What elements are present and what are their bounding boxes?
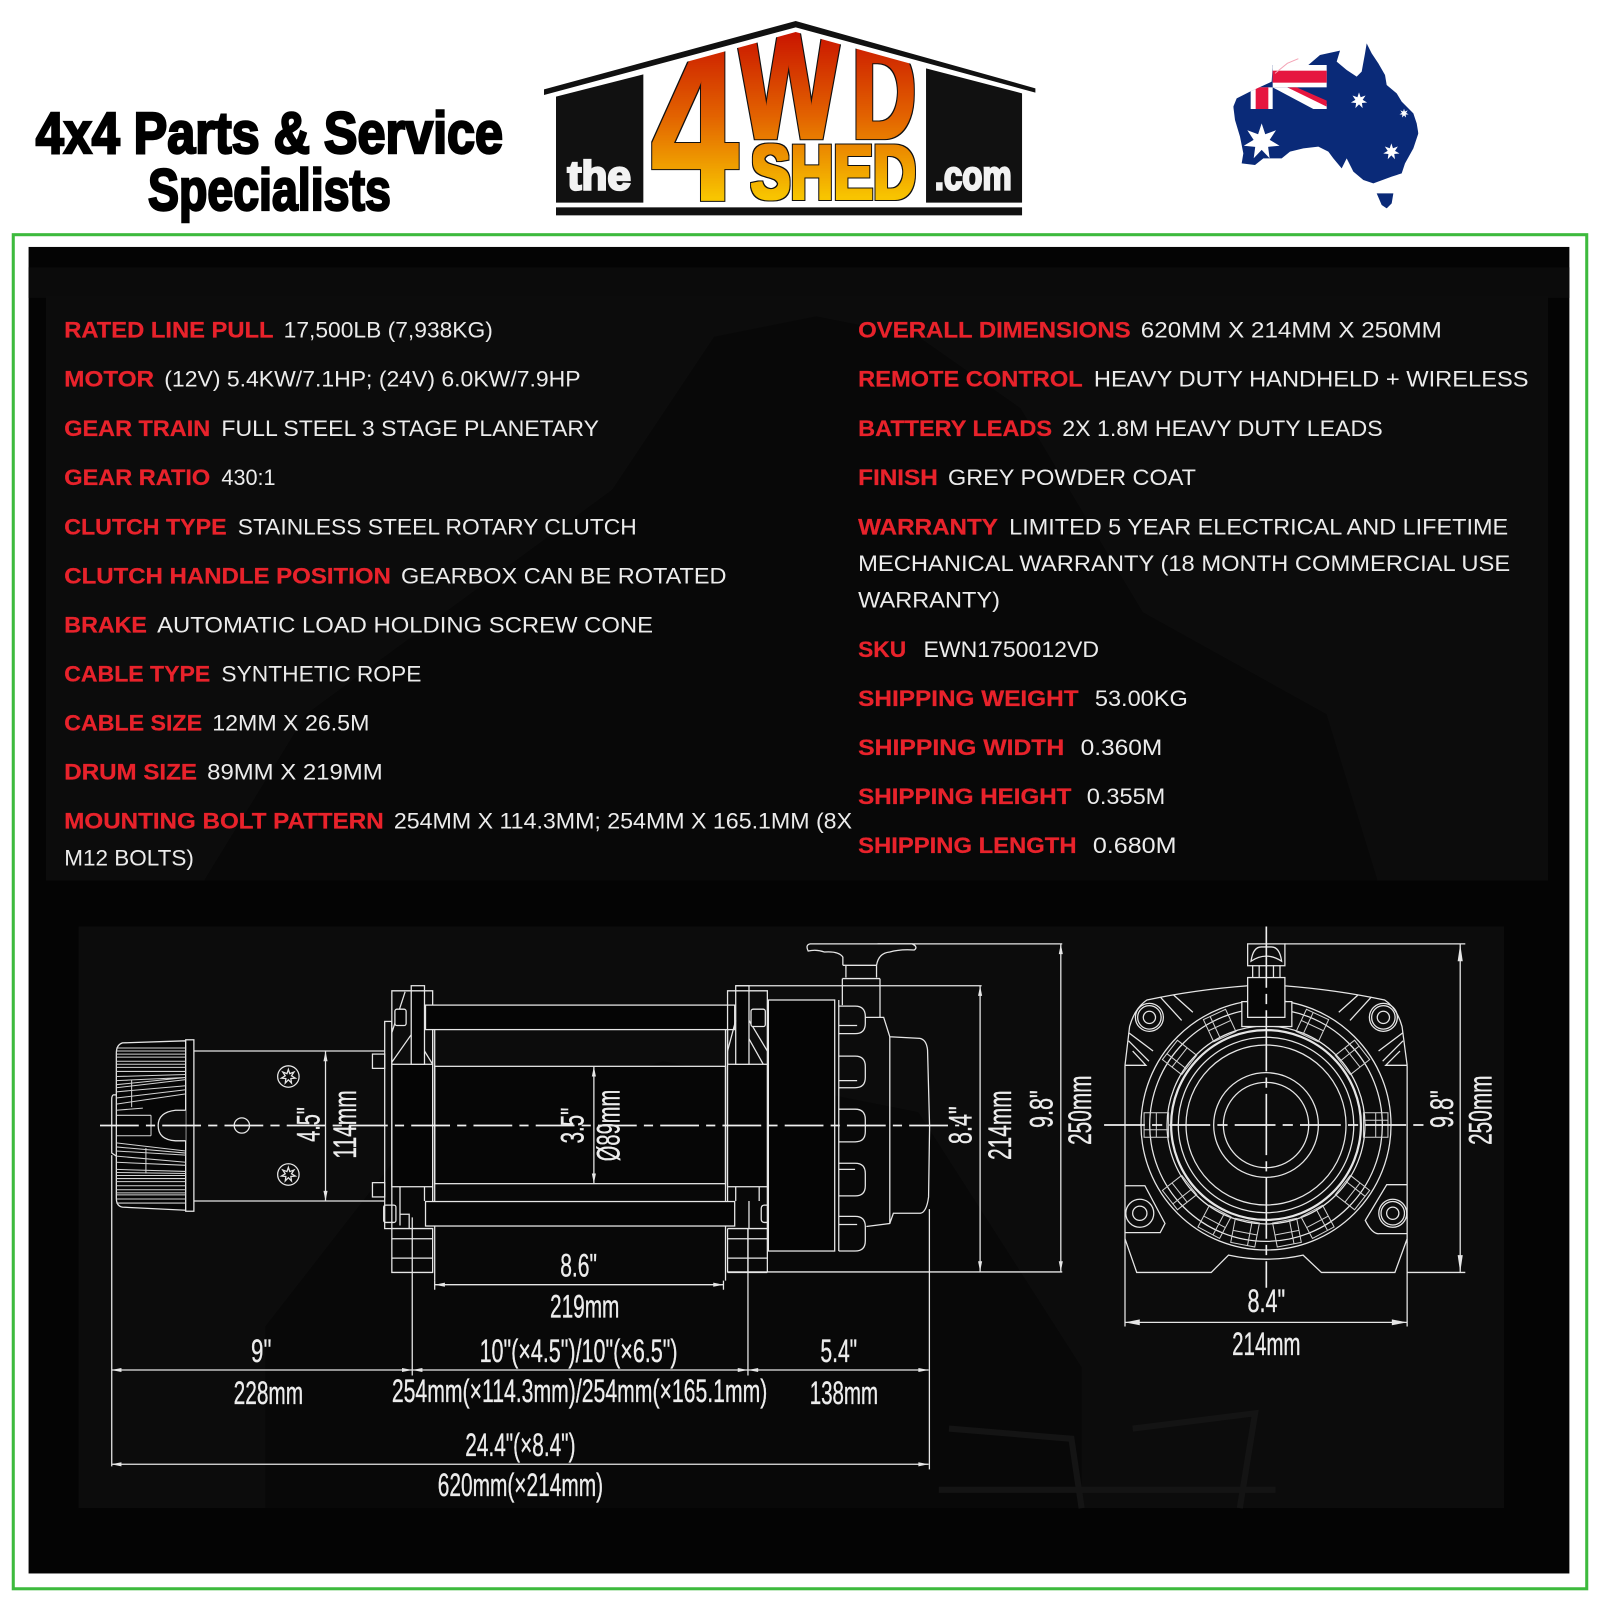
spec: clutch type: CLUTCH TYPE <box>64 515 227 540</box>
spec: shipping height: 0.355M <box>1087 784 1165 809</box>
spec: shipping length <box>858 833 1177 858</box>
spec: gear train <box>64 416 599 441</box>
dimension labels: 8.4" <box>1247 1282 1285 1319</box>
spec: mounting bolt pattern <box>64 809 852 870</box>
spec: shipping length: SHIPPING LENGTH <box>858 833 1077 858</box>
logo: the 4WD Shed .com <box>544 21 1036 216</box>
spec: overall dimensions: OVERALL DIMENSIONS <box>858 318 1131 343</box>
dimension labels: Ø89mm <box>589 1090 626 1161</box>
spec: finish: GREY POWDER COAT <box>948 465 1196 490</box>
dimension labels: 214mm <box>1232 1325 1301 1362</box>
spec: shipping weight: SHIPPING WEIGHT <box>858 686 1079 711</box>
spec: drum size: 89MM X 219MM <box>207 760 383 785</box>
dimension labels: 8.6" <box>560 1247 597 1284</box>
spec: shipping width: 0.360M <box>1081 735 1162 760</box>
dimension arrows <box>111 944 1063 1466</box>
spec: gear ratio: 430:1 <box>221 465 276 490</box>
drum and tie rods <box>426 1005 735 1281</box>
spec: warranty <box>858 515 1510 613</box>
spec: shipping weight <box>858 686 1188 711</box>
spec: mounting bolt pattern: M12 BOLTS) <box>64 845 194 870</box>
spec: sku: EWN1750012VD <box>923 637 1099 662</box>
spec: sku: SKU <box>858 637 906 662</box>
dimension labels: 138mm <box>810 1374 878 1411</box>
centre line <box>100 1125 959 1127</box>
logo: the 4WD Shed .com: W <box>737 0 841 171</box>
spec: shipping height <box>858 784 1165 809</box>
dimension lines <box>111 944 1062 1469</box>
spec: brake: BRAKE <box>64 613 147 638</box>
dimension labels: 228mm <box>234 1374 303 1411</box>
tagline: 4x4 Parts & Service Specialists: Specialists <box>148 158 391 223</box>
logo: the 4WD Shed .com: the <box>567 152 631 198</box>
spec: clutch handle position <box>64 564 727 589</box>
spec: warranty: WARRANTY) <box>858 588 1000 613</box>
dimension labels: 9.8" <box>1022 1090 1059 1128</box>
spec: shipping length: 0.680M <box>1093 833 1177 858</box>
dimension labels: 3.5" <box>554 1108 591 1143</box>
left mounting bracket <box>384 986 433 1272</box>
spec: battery leads: 2X 1.8M HEAVY DUTY LEADS <box>1062 416 1383 441</box>
spec: overall dimensions <box>858 318 1442 343</box>
spec: cable size <box>64 711 369 736</box>
dimension labels: 254mm(×114.3mm)/254mm(×165.1mm) <box>392 1372 767 1409</box>
spec: cable size: CABLE SIZE <box>64 711 202 736</box>
concentric rings <box>1141 1000 1391 1250</box>
spec: gear ratio: GEAR RATIO <box>64 465 210 490</box>
gearbox housing and clutch handle <box>768 944 930 1251</box>
dimension labels <box>1232 1076 1498 1362</box>
spec: remote control: HEAVY DUTY HANDHELD + WIRELESS <box>1094 367 1529 392</box>
spec: clutch type: STAINLESS STEEL ROTARY CLUTCH <box>238 515 637 540</box>
dimension arrows <box>1125 944 1463 1325</box>
motor knob with ribs <box>112 1040 194 1211</box>
dimension lines <box>1125 944 1465 1322</box>
logo: the 4WD Shed .com: SHED <box>751 131 916 216</box>
spec: drum size <box>64 760 383 785</box>
centre lines <box>1104 927 1430 1288</box>
spec: clutch type <box>64 515 637 540</box>
dimension labels: 24.4"(×8.4") <box>465 1426 576 1463</box>
spec: clutch handle position: CLUTCH HANDLE POSITION <box>64 564 391 589</box>
spec: drum size: DRUM SIZE <box>64 760 197 785</box>
spec: shipping width: SHIPPING WIDTH <box>858 735 1064 760</box>
tagline: 4x4 Parts & Service Specialists <box>36 101 503 223</box>
dimension labels: 114mm <box>326 1090 363 1159</box>
spec: battery leads <box>858 416 1383 441</box>
spec: rated line pull: RATED LINE PULL <box>64 318 274 343</box>
housing outline <box>1125 986 1407 1327</box>
ring lugs <box>1144 1009 1388 1247</box>
corner bolts <box>1126 1003 1407 1227</box>
dimension labels: 8.4" <box>941 1106 978 1144</box>
spec: rated line pull <box>64 318 493 343</box>
spec: remote control <box>858 367 1529 392</box>
spec: gear ratio <box>64 465 276 490</box>
spec: cable type: CABLE TYPE <box>64 662 210 687</box>
dimension labels: 250mm <box>1461 1076 1498 1145</box>
panel: specifications right column <box>858 318 1529 858</box>
logo: the 4WD Shed .com: .com <box>935 152 1012 198</box>
dimension labels: 250mm <box>1061 1076 1098 1145</box>
spec: warranty: MECHANICAL WARRANTY (18 MONTH COMMERCIAL USE <box>858 551 1510 576</box>
spec: motor: MOTOR <box>64 367 154 392</box>
dimension labels: 5.4" <box>820 1332 857 1369</box>
spec: rated line pull: 17,500LB (7,938KG) <box>284 318 493 343</box>
spec: mounting bolt pattern: 254MM X 114.3MM; 254MM X 165.1MM (8X <box>394 809 852 834</box>
spec: shipping width <box>858 735 1162 760</box>
logo: the 4WD Shed .com: D <box>852 19 916 166</box>
spec: remote control: REMOTE CONTROL <box>858 367 1083 392</box>
spec: motor: (12V) 5.4KW/7.1HP; (24V) 6.0KW/7.9HP <box>164 367 581 392</box>
spec: cable type <box>64 662 421 687</box>
spec: gear train: GEAR TRAIN <box>64 416 210 441</box>
dimension labels: 214mm <box>981 1091 1018 1160</box>
spec: overall dimensions: 620MM X 214MM X 250MM <box>1141 318 1442 343</box>
clutch handle top view <box>1242 944 1292 1027</box>
spec: warranty: LIMITED 5 YEAR ELECTRICAL AND LIFETIME <box>1009 515 1508 540</box>
spec: warranty: WARRANTY <box>858 515 998 540</box>
chart: winch side view technical drawing <box>100 944 1098 1503</box>
spec: clutch handle position: GEARBOX CAN BE ROTATED <box>401 564 727 589</box>
spec: mounting bolt pattern: MOUNTING BOLT PATTERN <box>64 809 384 834</box>
icon: Australia map with flag <box>1233 44 1418 208</box>
spec: battery leads: BATTERY LEADS <box>858 416 1052 441</box>
dimension labels: 9" <box>251 1332 271 1369</box>
spec: shipping height: SHIPPING HEIGHT <box>858 784 1072 809</box>
spec: cable size: 12MM X 26.5M <box>212 711 369 736</box>
panel: black background <box>29 247 1569 1573</box>
dimension labels: 10"(×4.5")/10"(×6.5") <box>480 1332 678 1369</box>
dimension labels: 9.8" <box>1423 1090 1460 1128</box>
panel: specifications left column <box>64 318 852 870</box>
chart: winch front view technical drawing <box>1104 927 1498 1362</box>
motor body <box>194 1051 385 1201</box>
dimension labels: 4.5" <box>289 1107 326 1142</box>
dimension labels <box>234 1076 1098 1503</box>
dimension labels: 620mm(×214mm) <box>438 1466 603 1503</box>
right mounting bracket <box>728 986 778 1272</box>
spec: finish: FINISH <box>858 465 938 490</box>
spec: shipping weight: 53.00KG <box>1095 686 1188 711</box>
logo: the 4WD Shed .com: 4 <box>651 0 738 248</box>
tagline: 4x4 Parts & Service Specialists: 4x4 Parts & Service <box>36 101 503 166</box>
spec: gear train: FULL STEEL 3 STAGE PLANETARY <box>221 416 599 441</box>
dimension labels: 219mm <box>550 1287 619 1324</box>
spec: brake: AUTOMATIC LOAD HOLDING SCREW CONE <box>157 613 653 638</box>
spec: cable type: SYNTHETIC ROPE <box>221 662 421 687</box>
